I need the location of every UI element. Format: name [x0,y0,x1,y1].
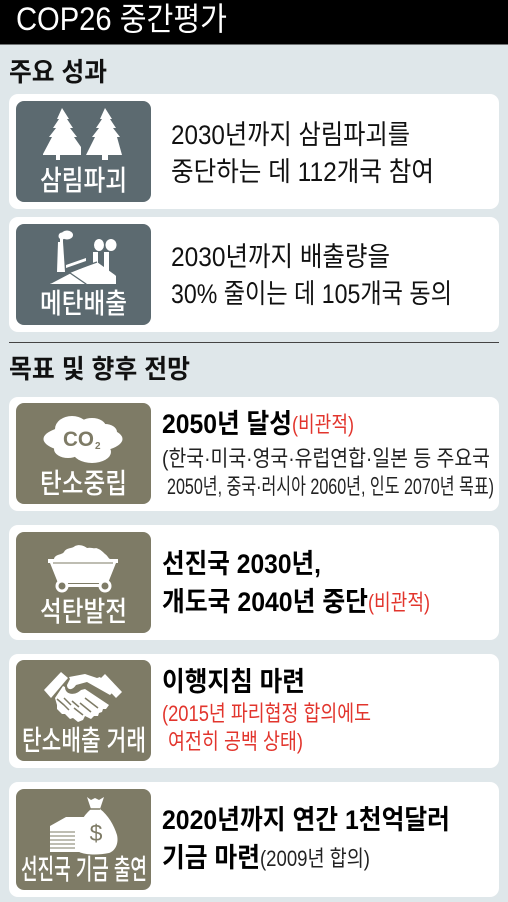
heading: 주요 성과: 주요 성과 [9,57,107,87]
icon: 삼림파괴 [16,101,151,202]
text: 기금 마련 [162,843,260,873]
panel: 탄소배출 거래 [9,654,499,768]
text: 2020년까지 연간 1천억달러 [162,805,450,835]
text: 선진국 2030년, [162,549,321,579]
title: COP26 중간평가 [16,1,227,37]
icon: 메탄배출: 메탄배출 [40,282,127,322]
text: (비관적) [292,412,354,437]
text [162,805,450,873]
text [162,549,430,617]
text: 2030년까지 배출량을 [171,242,390,272]
icon: 탄소중립: 2 [95,441,101,452]
icon: 탄소중립: CO [63,428,94,451]
panel: 메탄배출 [9,217,499,332]
icon: 메탄배출 [16,224,151,325]
text: 30% 줄이는 데 105개국 동의 [171,279,452,309]
text [171,120,434,187]
text: (비관적) [368,590,430,615]
panel: 삼림파괴 [9,94,499,209]
text [162,667,371,754]
text: (2009년 합의) [260,846,370,871]
text: 2050년 달성 [162,409,292,439]
text: (2015년 파리협정 합의에도 [162,701,371,726]
icon: 탄소중립 [16,403,151,504]
icon: 탄소중립: 탄소중립 [40,462,127,502]
icon: 탄소배출 거래: 탄소배출 거래 [22,719,146,759]
heading: 목표 및 향후 전망: 목표 및 향후 전망 [9,354,190,384]
icon: 선진국 기금 출연 [16,789,151,890]
text: 중단하는 데 112개국 참여 [171,157,434,187]
icon: 선진국 기금 출연: 선진국 기금 출연 [21,848,147,888]
text [162,409,494,499]
icon: 선진국 기금 출연: $ [90,820,103,846]
text: 개도국 2040년 중단 [162,587,368,617]
icon: 탄소배출 거래 [16,660,151,761]
title [0,0,508,44]
icon: 삼림파괴: 삼림파괴 [40,159,127,199]
icon: 석탄발전 [16,532,151,633]
text: 이행지침 마련 [162,667,305,697]
text: 여전히 공백 상태) [168,729,303,754]
panel: 석탄발전 [9,525,499,640]
text [171,242,452,309]
icon: 석탄발전: 석탄발전 [40,590,127,630]
panel: 탄소중립 [9,397,499,511]
panel: 선진국 기금 출연 [9,782,499,897]
text: 2030년까지 삼림파괴를 [171,120,410,150]
